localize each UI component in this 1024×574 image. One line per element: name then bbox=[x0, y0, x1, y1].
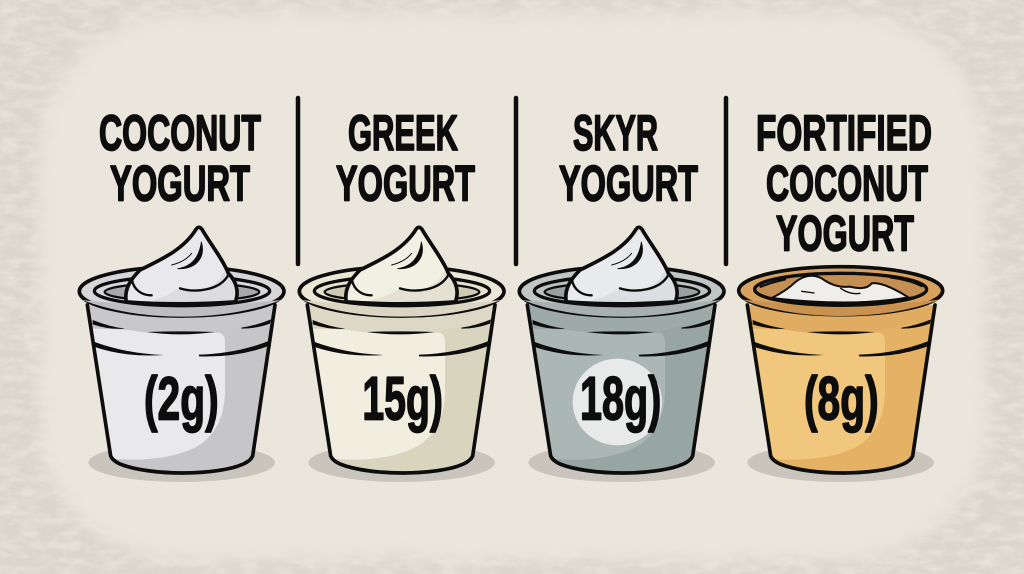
cup: skyr yogurt 18g bbox=[519, 227, 724, 482]
heading: greek yogurt: GREEK bbox=[348, 105, 458, 161]
heading: coconut yogurt: COCONUT bbox=[99, 105, 261, 161]
heading: greek yogurt: YOGURT bbox=[336, 156, 475, 212]
cup: greek yogurt 15g bbox=[299, 227, 504, 482]
label: 8g: (8g) bbox=[804, 363, 879, 432]
heading: greek yogurt bbox=[336, 105, 475, 212]
heading: fortified coconut yogurt: FORTIFIED bbox=[756, 105, 932, 161]
heading: skyr yogurt bbox=[559, 105, 698, 212]
heading: fortified coconut yogurt: COCONUT bbox=[766, 156, 928, 212]
heading: fortified coconut yogurt: YOGURT bbox=[776, 206, 914, 262]
heading: fortified coconut yogurt bbox=[756, 105, 932, 262]
divider 3 bbox=[724, 98, 728, 264]
label: 15g: 15g) bbox=[362, 363, 443, 432]
cup: fortified coconut yogurt 8g bbox=[739, 267, 943, 482]
label circle bbox=[573, 359, 662, 445]
heading: skyr yogurt: SKYR bbox=[573, 105, 658, 161]
divider 1 bbox=[296, 98, 300, 264]
heading: skyr yogurt: YOGURT bbox=[559, 156, 698, 212]
label: 2g: (2g) bbox=[144, 363, 219, 432]
heading: coconut yogurt: YOGURT bbox=[110, 156, 250, 212]
heading: coconut yogurt bbox=[99, 105, 261, 212]
cup: coconut yogurt 2g bbox=[79, 227, 284, 482]
label: 18g: 18g) bbox=[580, 363, 661, 432]
divider 2 bbox=[514, 98, 518, 264]
